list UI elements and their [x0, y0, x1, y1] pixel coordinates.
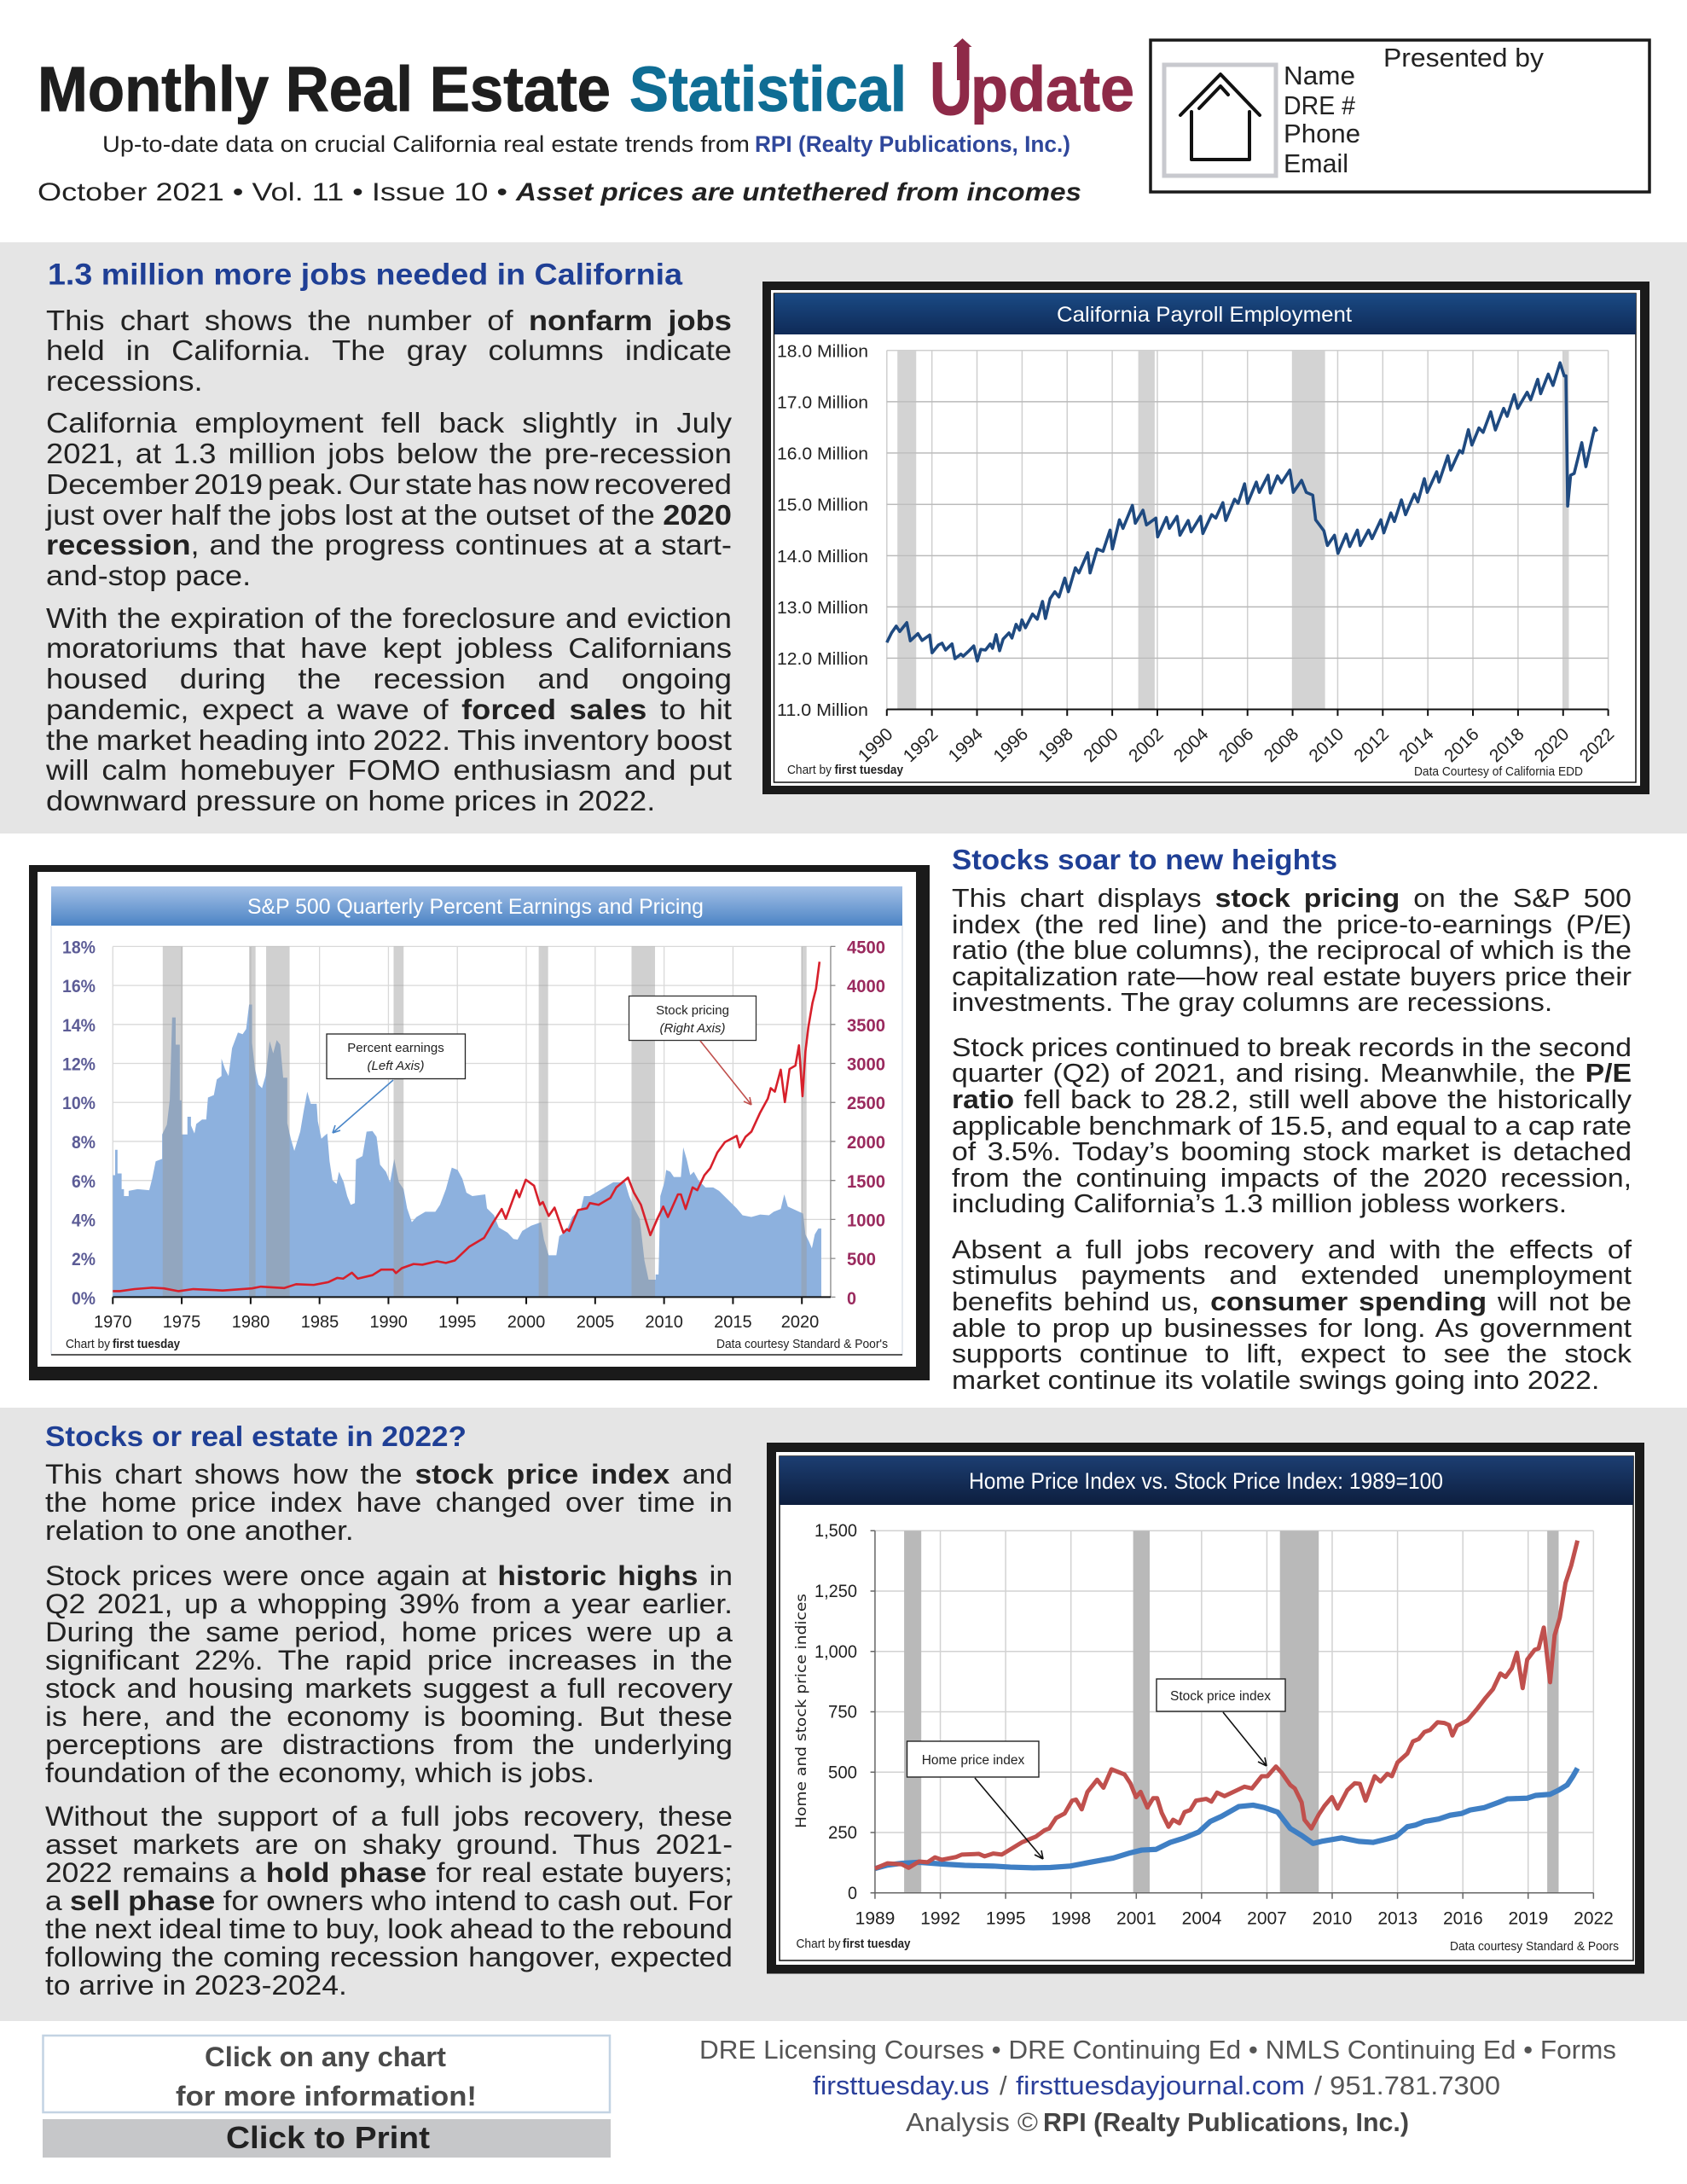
- left axis labels: 2%: [72, 1250, 96, 1269]
- y axis title: Home and stock price indices: [793, 1594, 810, 1828]
- text block: stocks soar: investments. The gray columns are recessions.: [952, 987, 1552, 1017]
- text block: California jobs: downward pressure on home prices in 2022.: [46, 785, 655, 816]
- heading: 1.3 million more jobs needed in California: [48, 258, 683, 292]
- chart: home price vs stock price index: [767, 1443, 1644, 1974]
- callout: home price index: Home price index: [922, 1753, 1025, 1768]
- right axis labels: 1000: [847, 1211, 885, 1230]
- callout: percent earnings: [327, 1034, 466, 1133]
- heading: Stocks soar to new heights: [952, 844, 1337, 875]
- x axis labels: 2002: [1125, 724, 1168, 766]
- x axis labels: 2010: [1313, 1909, 1352, 1928]
- left axis labels: 14%: [62, 1016, 96, 1036]
- right axis labels: 2500: [847, 1094, 885, 1113]
- x axis labels: 2007: [1247, 1909, 1287, 1928]
- text block: California jobs: December 2019 peak. Our state has now recovered: [46, 468, 732, 500]
- y axis labels: 16.0 Million: [777, 445, 868, 464]
- services line: DRE Licensing Courses • DRE Continuing Ed • NMLS Continuing Ed • Forms: [699, 2035, 1616, 2065]
- text block: stocks or real estate: Without the support of a full jobs recovery, these: [45, 1800, 733, 1831]
- text block: California jobs: California employment fell back slightly in July: [46, 407, 732, 439]
- text block: stocks or real estate: asset markets are on shaky ground. Thus 2021-: [45, 1829, 733, 1860]
- right axis labels: [847, 938, 885, 1309]
- presenter box: [1151, 40, 1649, 192]
- right axis labels: 4500: [847, 938, 885, 957]
- text block: stocks or real estate: a sell phase for owners who intend to cash out. For: [45, 1885, 733, 1916]
- left axis labels: 10%: [62, 1094, 96, 1113]
- title: Statistical: [629, 54, 907, 125]
- right axis labels: 0: [847, 1289, 856, 1309]
- issue line: [38, 178, 1081, 206]
- x axis labels: 1996: [989, 724, 1032, 766]
- title: Monthly Real Estate: [38, 54, 611, 125]
- y axis labels: 14.0 Million: [777, 548, 868, 566]
- x axis labels: 1998: [1035, 724, 1077, 766]
- left axis labels: 0%: [72, 1289, 96, 1309]
- chart title: California Payroll Employment: [1057, 303, 1352, 327]
- y axis labels: 1,250: [815, 1582, 857, 1601]
- left axis labels: 16%: [62, 977, 96, 996]
- y axis labels: 1,500: [815, 1521, 857, 1541]
- x axis labels: 2005: [577, 1313, 614, 1332]
- right axis labels: 3500: [847, 1016, 885, 1036]
- button: click to print: Click to Print: [226, 2120, 430, 2155]
- panel: stocks soar: [0, 834, 1687, 1408]
- text block: stocks or real estate: relation to one another.: [45, 1515, 354, 1546]
- x axis labels: 2004: [1182, 1909, 1222, 1928]
- text block: stocks soar: able to prop up businesses for long. As government: [952, 1313, 1632, 1343]
- x axis labels: 2016: [1441, 724, 1483, 766]
- y axis labels: 15.0 Million: [777, 497, 868, 515]
- text block: stocks or real estate: During the same period, home prices were up a: [45, 1616, 733, 1647]
- text block: California jobs: recessions.: [46, 365, 203, 397]
- heading: Stocks or real estate in 2022?: [45, 1420, 467, 1452]
- presenter box: DRE #: [1284, 90, 1356, 120]
- button: click to print: [43, 2119, 611, 2158]
- text block: California jobs: With the expiration of the foreclosure and eviction: [46, 602, 732, 634]
- chart credits: Data courtesy Standard & Poors: [1450, 1940, 1619, 1954]
- x axis labels: 2001: [1116, 1909, 1157, 1928]
- text block: stocks soar: [952, 883, 1632, 1395]
- chart title: [51, 886, 902, 926]
- chart credits: Chart by: [66, 1338, 111, 1351]
- x axis labels: 1980: [232, 1313, 270, 1332]
- chart credits: first tuesday: [834, 764, 903, 777]
- chart credits: first tuesday: [113, 1338, 180, 1351]
- text block: stocks or real estate: significant 22%. The rapid price increases in the: [45, 1645, 733, 1676]
- line: stock pricing: [113, 961, 820, 1291]
- text block: California jobs: just over half the jobs lost at the outset of the 2020: [46, 498, 732, 531]
- title: pdate: [971, 54, 1134, 125]
- chart credits: Chart by: [787, 764, 832, 777]
- x axis labels: 2012: [1350, 724, 1393, 766]
- contact line: firsttuesdayjournal.com: [1016, 2071, 1305, 2100]
- right axis labels: 3000: [847, 1055, 885, 1075]
- y axis labels: 1,000: [815, 1642, 857, 1662]
- chart: S&P 500 earnings and pricing: [29, 865, 930, 1380]
- chart title: S&P 500 Quarterly Percent Earnings and Pricing: [247, 895, 704, 919]
- y axis labels: [777, 342, 868, 720]
- callout: stock pricing: [629, 996, 756, 1105]
- text block: stocks soar: quarter (Q2) of 2021, and rising. Meanwhile, the P/E: [952, 1058, 1632, 1088]
- presenter box: Email: [1284, 148, 1348, 178]
- text block: stocks soar: Absent a full jobs recovery and with the effects of: [952, 1234, 1632, 1264]
- left axis labels: 12%: [62, 1055, 96, 1075]
- chart credits: first tuesday: [843, 1937, 911, 1951]
- right axis labels: 4000: [847, 977, 885, 996]
- text block: stocks or real estate: is here, and the economy is booming. But these: [45, 1701, 733, 1732]
- x axis labels: 2016: [1443, 1909, 1483, 1928]
- text block: stocks soar: of 3.5%. Today’s booming stock market is detached: [952, 1136, 1632, 1166]
- x axis labels: 1994: [945, 724, 987, 766]
- plot area: [113, 946, 835, 1304]
- x axis labels: 1990: [855, 724, 896, 766]
- text block: stocks soar: ratio fell back to 28.2, still well above the historically: [952, 1084, 1632, 1114]
- chart credits: Data Courtesy of California EDD: [1414, 765, 1583, 779]
- x axis labels: 1970: [94, 1313, 132, 1332]
- line: payroll employment: [887, 363, 1597, 661]
- x axis labels: 2006: [1215, 724, 1257, 766]
- x axis labels: 1992: [920, 1909, 960, 1928]
- text block: stocks soar: capitalization rate—how real estate buyers price their: [952, 961, 1632, 991]
- button: click on any chart: Click on any chart: [205, 2042, 446, 2072]
- x axis labels: 2013: [1377, 1909, 1417, 1928]
- line: home price index: [875, 1769, 1578, 1868]
- text block: stocks soar: This chart displays stock pricing on the S&P 500: [952, 883, 1632, 913]
- x axis labels: 2022: [1576, 724, 1618, 766]
- text block: California jobs: and-stop pace.: [46, 560, 251, 591]
- callout: stock price index: [1157, 1679, 1285, 1766]
- callout: percent earnings: (Left Axis): [368, 1059, 424, 1073]
- text block: stocks soar: benefits behind us, consumer spending will not be: [952, 1287, 1632, 1316]
- contact line: firsttuesday.us: [813, 2071, 989, 2100]
- chart credits: [787, 764, 1583, 779]
- copyright line: Analysis ©: [906, 2107, 1038, 2137]
- y axis labels: 11.0 Million: [777, 701, 868, 720]
- x axis labels: [855, 724, 1618, 766]
- right axis labels: 2000: [847, 1133, 885, 1153]
- text block: California jobs: held in California. The gray columns indicate: [46, 334, 732, 366]
- icon: up arrow on the U: [954, 38, 972, 80]
- callout: stock price index: Stock price index: [1170, 1689, 1271, 1704]
- title: U: [930, 46, 972, 131]
- x axis labels: 1990: [369, 1313, 408, 1332]
- chart credits: [797, 1937, 1619, 1954]
- text block: California jobs: the market heading into 2022. This inventory boost: [46, 724, 732, 756]
- text block: California jobs: This chart shows the number of nonfarm jobs: [46, 305, 732, 336]
- chart title: [774, 293, 1636, 334]
- x axis labels: 2000: [507, 1313, 545, 1332]
- text block: stocks soar: ratio (the blue columns), the reciprocal of which is the: [952, 935, 1632, 965]
- callout: percent earnings: Percent earnings: [347, 1041, 444, 1055]
- left axis labels: 18%: [62, 938, 96, 957]
- text block: stocks or real estate: This chart shows how the stock price index and: [45, 1459, 733, 1490]
- x axis labels: 1998: [1051, 1909, 1091, 1928]
- chart credits: Chart by: [797, 1937, 841, 1951]
- contact line: [813, 2071, 1500, 2100]
- callout: stock pricing: Stock pricing: [656, 1003, 729, 1018]
- x axis labels: 2008: [1261, 724, 1302, 766]
- text block: stocks or real estate: Q2 2021, up a whopping 39% from a year earlier.: [45, 1589, 733, 1619]
- text block: California jobs: [45, 305, 732, 816]
- text block: California jobs: pandemic, expect a wave of forced sales to hit: [46, 694, 732, 725]
- x axis labels: [855, 1909, 1614, 1928]
- x axis labels: 2022: [1574, 1909, 1614, 1928]
- left axis labels: 4%: [72, 1211, 96, 1230]
- text block: stocks or real estate: following the coming recession hangover, expected: [45, 1942, 733, 1972]
- text block: stocks or real estate: Stock prices were once again at historic highs in: [45, 1560, 733, 1590]
- text block: California jobs: moratoriums that have kept jobless Californians: [46, 632, 732, 664]
- y axis labels: 750: [828, 1703, 857, 1722]
- text block: stocks or real estate: 2022 remains a hold phase for real estate buyers;: [45, 1856, 733, 1887]
- x axis labels: 2000: [1080, 724, 1122, 766]
- x axis labels: [94, 1313, 819, 1332]
- chart credits: [66, 1338, 888, 1351]
- presenter box: Presented by: [1383, 43, 1545, 73]
- text block: stocks soar: index (the red line) and the price-to-earnings (P/E): [952, 909, 1632, 939]
- chart title: [780, 1456, 1633, 1505]
- x axis labels: 2014: [1395, 724, 1438, 766]
- subtitle: Up-to-date data on crucial California real estate trends from: [102, 131, 750, 157]
- x axis labels: 1989: [855, 1909, 895, 1928]
- text block: stocks or real estate: perceptions are distractions from the underlying: [45, 1728, 733, 1759]
- y axis labels: 18.0 Million: [777, 342, 868, 361]
- text block: stocks or real estate: foundation of the economy, which is jobs.: [45, 1757, 594, 1788]
- panel: footer: [0, 2021, 1687, 2184]
- x axis labels: 1995: [986, 1909, 1026, 1928]
- text block: stocks soar: applicable benchmark of 15.5, and equal to a cap rate: [952, 1111, 1632, 1141]
- x axis labels: 1995: [438, 1313, 476, 1332]
- text block: California jobs: will calm homebuyer FOMO enthusiasm and put: [46, 754, 732, 786]
- button: click on any chart: [43, 2036, 610, 2112]
- panel: header: [0, 0, 1687, 242]
- x axis labels: 1985: [301, 1313, 339, 1332]
- text block: stocks or real estate: to arrive in 2023-2024.: [45, 1969, 347, 2000]
- left axis labels: 8%: [72, 1133, 96, 1153]
- left axis labels: 6%: [72, 1172, 96, 1192]
- title: [38, 46, 1134, 131]
- text block: California jobs: 2021, at 1.3 million jobs below the pre-recession: [46, 438, 732, 469]
- y axis labels: 250: [828, 1823, 857, 1843]
- issue line: Asset prices are untethered from incomes: [515, 178, 1081, 206]
- chart title: Home Price Index vs. Stock Price Index: 1989=100: [969, 1468, 1443, 1494]
- chart: California Payroll Employment: [762, 282, 1649, 794]
- y axis labels: 0: [848, 1884, 857, 1903]
- callout: home price index: [907, 1741, 1043, 1859]
- copyright line: RPI (Realty Publications, Inc.): [1043, 2107, 1409, 2137]
- bars: percent earnings: [113, 1005, 821, 1297]
- y axis labels: 500: [828, 1763, 857, 1782]
- text block: stocks soar: Stock prices continued to break records in the second: [952, 1032, 1632, 1062]
- x axis labels: 2019: [1509, 1909, 1548, 1928]
- left axis labels: [62, 938, 96, 1309]
- button: click on any chart: for more information!: [176, 2081, 477, 2111]
- right axis labels: 1500: [847, 1172, 885, 1192]
- x axis labels: 2004: [1170, 724, 1213, 766]
- x axis labels: 1992: [900, 724, 942, 766]
- y axis labels: 12.0 Million: [777, 650, 868, 669]
- y axis labels: 13.0 Million: [777, 599, 868, 618]
- text block: stocks soar: market continue its volatile swings going into 2022.: [952, 1365, 1599, 1395]
- x axis labels: 2010: [1305, 724, 1348, 766]
- x axis labels: 2018: [1486, 724, 1528, 766]
- x axis labels: 2010: [645, 1313, 683, 1332]
- x axis labels: 2020: [781, 1313, 819, 1332]
- text block: stocks or real estate: stock and housing markets suggest a full recovery: [45, 1672, 733, 1703]
- text block: stocks soar: stimulus payments and extended unemployment: [952, 1260, 1632, 1290]
- chart credits: Data courtesy Standard & Poor's: [716, 1338, 888, 1351]
- x axis labels: 2015: [714, 1313, 752, 1332]
- panel: California jobs: [0, 242, 1687, 834]
- contact line: /: [1000, 2071, 1007, 2100]
- plot area: [871, 1531, 1593, 1899]
- callout: stock pricing: (Right Axis): [660, 1021, 725, 1036]
- text block: California jobs: housed during the recession and ongoing: [46, 663, 732, 694]
- text block: stocks or real estate: the home price index have changed over time in: [45, 1487, 733, 1518]
- issue line: October 2021 • Vol. 11 • Issue 10 •: [38, 178, 507, 206]
- icon: house: [1164, 65, 1276, 176]
- contact line: / 951.781.7300: [1314, 2071, 1500, 2100]
- text block: California jobs: recession, and the progress continues at a start-: [46, 529, 732, 561]
- x axis labels: 1975: [163, 1313, 200, 1332]
- presenter box: Phone: [1284, 119, 1360, 148]
- line: stock price index: [875, 1541, 1578, 1868]
- y axis labels: [815, 1521, 857, 1903]
- right axis labels: 500: [847, 1250, 876, 1269]
- text block: stocks soar: from the continuing impacts of the 2020 recession,: [952, 1163, 1632, 1193]
- text block: stocks or real estate: [45, 1459, 733, 2000]
- panel: stocks or real estate: [0, 1408, 1687, 2021]
- subtitle: RPI (Realty Publications, Inc.): [755, 131, 1070, 157]
- x axis labels: 2020: [1531, 724, 1573, 766]
- text block: stocks or real estate: the next ideal time to buy, look ahead to the rebound: [45, 1913, 733, 1943]
- text block: stocks soar: including California’s 1.3 million jobless workers.: [952, 1188, 1567, 1218]
- plot area: [887, 351, 1609, 716]
- subtitle: [102, 131, 1070, 157]
- text block: stocks soar: supports continue to lift, expect to see the stock: [952, 1339, 1632, 1368]
- presenter box: Name: [1284, 61, 1355, 90]
- y axis labels: 17.0 Million: [777, 394, 868, 413]
